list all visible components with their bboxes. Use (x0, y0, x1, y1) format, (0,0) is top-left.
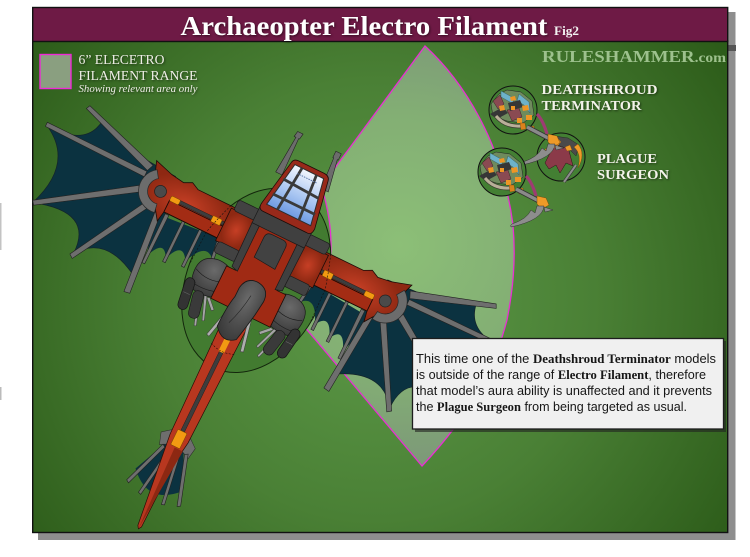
label: deathshroud terminator: DEATHSHROUD (542, 83, 658, 98)
canopy (258, 154, 338, 235)
callout text: that model’s aura ability is unaffected and it prevents (416, 383, 712, 398)
brand: rulesHammer: RULESHAMMER .com (542, 47, 726, 66)
fuselage (211, 204, 316, 327)
icon: right wing (248, 215, 524, 454)
label: plague surgeon (597, 152, 669, 183)
panel: electro filament range area (303, 46, 514, 466)
legend text (78, 53, 198, 95)
edge artefacts (0, 203, 2, 400)
model: deathshroud terminator lower (478, 148, 553, 227)
legend text: 6” ELECETRO (78, 53, 164, 68)
callout text: the Plague Surgeon from being targeted as usual. (416, 399, 687, 414)
legend text: Showing relevant area only (78, 84, 198, 95)
icon: left wing (0, 92, 271, 331)
callout text: is outside of the range of Electro Filament, therefore (416, 367, 706, 382)
legend swatch (40, 54, 71, 88)
icon: tail fins (124, 420, 210, 512)
model: deathshroud terminator top (489, 86, 564, 165)
archaeopter aircraft (0, 92, 524, 533)
legend text: FILAMENT RANGE (78, 69, 198, 84)
callout text: This time one of the Deathshroud Terminator models (416, 351, 716, 366)
model: plague surgeon (537, 133, 585, 182)
label: plague surgeon: SURGEON (597, 168, 669, 183)
label: plague surgeon: PLAGUE (597, 152, 657, 167)
icon: cannon barrels (276, 131, 346, 196)
label: deathshroud terminator: TERMINATOR (542, 99, 642, 114)
figure label: Fig2 (554, 24, 579, 38)
legend (40, 53, 198, 95)
exhaust capsule (206, 272, 274, 353)
title bar (33, 8, 728, 42)
tail boom (124, 305, 253, 533)
callout text (416, 351, 716, 414)
model base oval (153, 163, 360, 397)
title: Archaeopter Electro Filament (180, 11, 548, 41)
label: deathshroud terminator (542, 83, 658, 114)
callout (412, 338, 726, 432)
